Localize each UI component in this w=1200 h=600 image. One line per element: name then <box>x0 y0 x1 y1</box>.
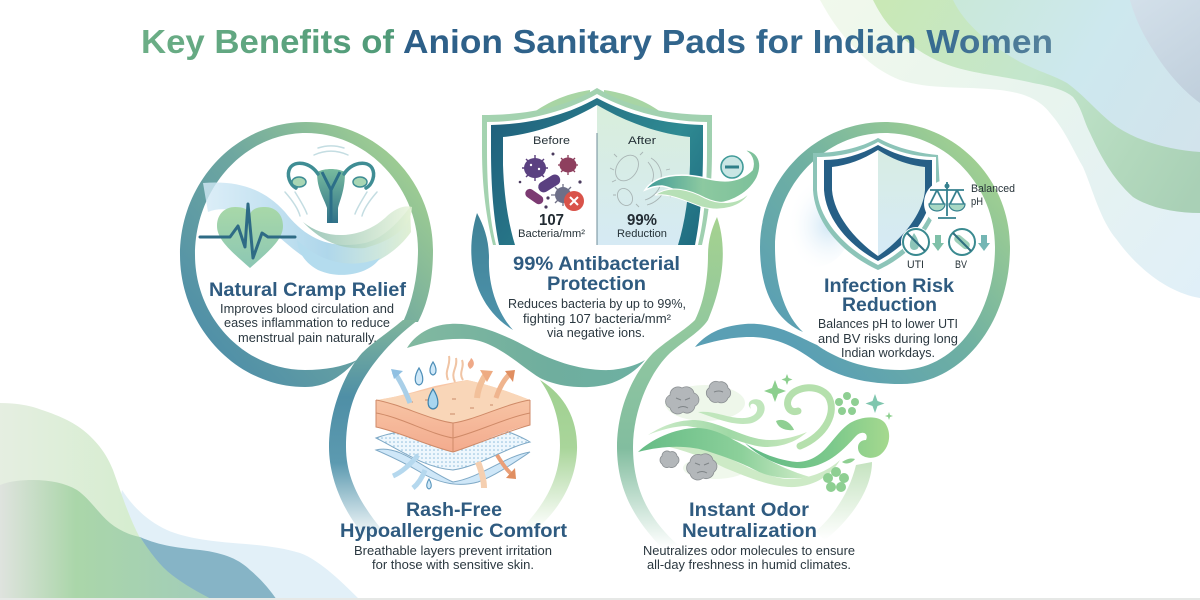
glow behind shield <box>779 183 851 267</box>
illustration: skin and breathable layers <box>376 356 530 489</box>
description <box>818 317 958 360</box>
icon: heart with pulse <box>200 204 295 268</box>
description <box>643 544 855 572</box>
after column <box>610 135 671 240</box>
heading: 99% Antibacterial <box>513 254 680 275</box>
title <box>141 23 1053 60</box>
heading: Natural Cramp Relief <box>209 280 407 301</box>
ring: right arc <box>525 380 577 530</box>
heading: Reduction <box>842 295 937 316</box>
illustration: flowing waves <box>203 182 412 275</box>
background: top-right waves <box>820 0 1200 298</box>
heading <box>340 500 568 542</box>
icon: faded bacteria <box>610 151 671 208</box>
ring: left arc <box>471 213 513 330</box>
description: menstrual pain naturally. <box>238 331 377 345</box>
icon: shield <box>813 138 940 270</box>
panel: natural cramp relief <box>180 122 433 387</box>
panel: 99% antibacterial protection <box>471 88 760 548</box>
description: fighting 107 bacteria/mm² <box>523 312 671 326</box>
ring: right arc <box>617 217 723 548</box>
ring: top arcs <box>530 90 665 115</box>
description: Improves blood circulation and <box>220 302 394 316</box>
icon: odor clouds <box>660 381 731 480</box>
icon: bacteria <box>519 152 584 211</box>
label: balanced pH <box>971 183 1015 208</box>
before column: 107 <box>539 212 564 229</box>
title: Key Benefits of <box>141 23 395 60</box>
heading <box>824 276 954 316</box>
title: Anion Sanitary Pads for Indian Women <box>403 23 1053 60</box>
description: via negative ions. <box>547 326 645 340</box>
ring: left arc <box>329 320 418 540</box>
icon: sparkles <box>764 374 893 420</box>
icon: shield before and after <box>482 88 712 245</box>
icon: flowers and leaves <box>776 392 859 492</box>
heading: Protection <box>547 274 646 295</box>
ring: top wave <box>407 324 645 387</box>
heading: Rash-Free <box>406 500 502 521</box>
icon: uterus <box>285 146 377 223</box>
heading <box>682 500 817 542</box>
description <box>508 297 686 340</box>
label: balanced pH: Balanced <box>971 183 1015 195</box>
icon: UTI: UTI <box>907 259 924 271</box>
heading: Hypoallergenic Comfort <box>340 521 568 542</box>
before column: Before <box>533 135 570 147</box>
description: Balances pH to lower UTI <box>818 317 958 331</box>
description: eases inflammation to reduce <box>224 316 390 330</box>
ring: right arc <box>815 462 872 540</box>
description: Neutralizes odor molecules to ensure <box>643 544 855 558</box>
icon: negative ion swirl <box>645 150 760 209</box>
description: and BV risks during long <box>818 332 958 346</box>
heading <box>513 254 680 295</box>
heading: Instant Odor <box>689 500 810 521</box>
panel: rash-free hypoallergenic comfort <box>329 320 645 572</box>
heading: Infection Risk <box>824 276 954 297</box>
icon: BV <box>947 227 990 271</box>
description <box>220 302 394 345</box>
ring: cramp relief circle <box>180 122 433 387</box>
after column: After <box>628 135 656 147</box>
description: Reduces bacteria by up to 99%, <box>508 297 686 311</box>
background: bottom-left waves <box>0 403 1200 600</box>
description: Indian workdays. <box>841 346 935 360</box>
description <box>354 544 552 572</box>
ring: infection circle with lower wave <box>695 122 1010 384</box>
description: all-day freshness in humid climates. <box>647 558 851 572</box>
before column: Bacteria/mm² <box>518 228 585 240</box>
icon: UTI <box>901 227 944 271</box>
panel: infection risk reduction <box>695 122 1015 384</box>
heading: Neutralization <box>682 521 817 542</box>
after column: Reduction <box>617 228 667 240</box>
illustration: odor clouds and fresh air swirl <box>638 374 893 492</box>
before column <box>518 135 585 240</box>
description: Breathable layers prevent irritation <box>354 544 552 558</box>
after column: 99% <box>627 212 657 229</box>
label: balanced pH: pH <box>971 196 983 208</box>
description: for those with sensitive skin. <box>372 558 534 572</box>
icon: BV: BV <box>955 259 968 271</box>
icon: balance scale <box>924 180 970 226</box>
panel: instant odor neutralization <box>638 374 893 572</box>
